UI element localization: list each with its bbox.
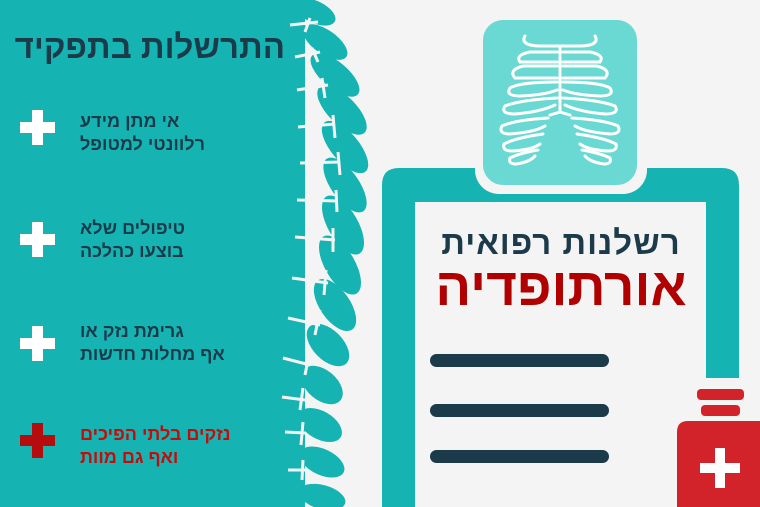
- item 1: [20, 110, 205, 154]
- item 2: [20, 218, 185, 261]
- item 4: נזקים בלתי הפיכים: [80, 424, 231, 444]
- item 2: בוצעו כהלכה: [80, 241, 184, 261]
- lines: [430, 354, 609, 463]
- item 4: [20, 423, 231, 467]
- title left: התרשלות בתפקיד: [15, 28, 285, 65]
- clipboard: [382, 20, 760, 507]
- item 4: ואף גם מוות: [80, 447, 178, 467]
- item 1: רלוונטי למטופל: [80, 134, 205, 154]
- item 3: אף מחלות חדשות: [80, 344, 225, 364]
- bottle: [677, 389, 760, 507]
- item 1: אי מתן מידע: [80, 111, 179, 131]
- main title: רשלנות רפואית: [441, 224, 681, 261]
- item 3: [20, 321, 225, 364]
- left panel with spine: [0, 0, 368, 507]
- item 2: טיפולים שלא: [80, 218, 185, 238]
- main title: אורתופדיה: [435, 258, 687, 317]
- main title: [435, 224, 687, 317]
- xray: [475, 12, 647, 194]
- item 3: גרימת נזק או: [80, 321, 184, 341]
